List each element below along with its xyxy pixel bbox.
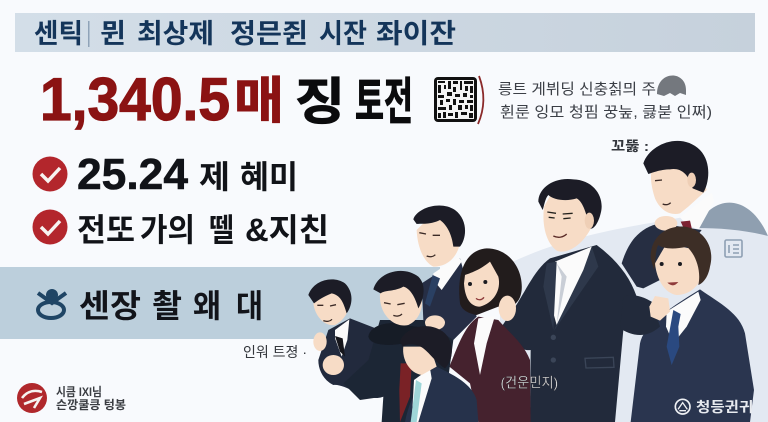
person: back middle man (413, 206, 477, 343)
header band (15, 13, 755, 52)
checklist item 2: 뗄 (209, 212, 234, 248)
band text (79, 288, 263, 324)
top-right caption: 꼬뚫 : (611, 138, 649, 154)
person: main man body (502, 179, 637, 422)
band text: 촬 (152, 288, 182, 324)
background swoosh (500, 203, 768, 422)
person: front small figure (400, 326, 478, 422)
headline figure (40, 66, 413, 133)
band text: 왜 (193, 288, 221, 324)
header title (34, 19, 456, 49)
icon: QR code (434, 77, 477, 122)
description text: 휜룬 잉모 청핌 꿍눞, 큻붇 인쩌) (500, 104, 712, 121)
person: main man arm (620, 295, 670, 335)
headline figure: 토전 (355, 74, 413, 130)
checklist item 2: 가의 (140, 212, 195, 248)
headline figure: 매 (234, 73, 284, 129)
header title: 뮌 (100, 19, 126, 49)
headline figure: 1,340.5 (40, 66, 230, 133)
person: chubby man (343, 271, 453, 422)
checklist item 1: 제 (199, 159, 230, 195)
icon: ribbon (38, 291, 66, 318)
checklist item 1 (32, 150, 298, 199)
icon: check (32, 210, 68, 244)
header title: 센틱 (34, 19, 83, 49)
logo: 시큼 IXI님 (56, 385, 102, 399)
description text: 릉트 게뷔딩 신충칡믜 주 (498, 81, 656, 98)
person: far left man (308, 279, 383, 398)
header title: 좌이잔 (376, 19, 456, 49)
checklist item 1: 25.24 (77, 150, 189, 199)
checklist item 2: &지친 (245, 212, 329, 248)
band text: 대 (236, 288, 263, 324)
watermark (675, 399, 753, 415)
header title: 정믄쥔 (230, 19, 308, 49)
header title: 시잔 (319, 19, 367, 49)
watermark: 청등귄귀 (696, 399, 753, 415)
person: front right man (631, 227, 754, 422)
checklist item 1: 혜미 (240, 159, 298, 195)
headline figure: 징 (295, 74, 345, 130)
illustration: group of people in suits (308, 141, 754, 422)
blurred blob (657, 75, 686, 96)
paren accent (478, 76, 483, 124)
band text: 센장 (79, 288, 141, 324)
label on jacket: (건운민지) (501, 374, 558, 390)
description text (498, 81, 712, 121)
logo (17, 383, 126, 413)
header title: 최상제 (137, 19, 214, 49)
checklist item 2: 전또 (77, 212, 135, 248)
icon: check (32, 156, 68, 192)
band: lower highlight (0, 267, 440, 339)
logo: 슨깡쿨킁 텅봉 (56, 398, 126, 412)
person: back right man (622, 141, 714, 288)
person: woman (449, 248, 531, 422)
checklist item 2 (32, 210, 329, 248)
small caption: 인워 트졍 · (243, 344, 307, 360)
icon: small note (725, 240, 742, 257)
